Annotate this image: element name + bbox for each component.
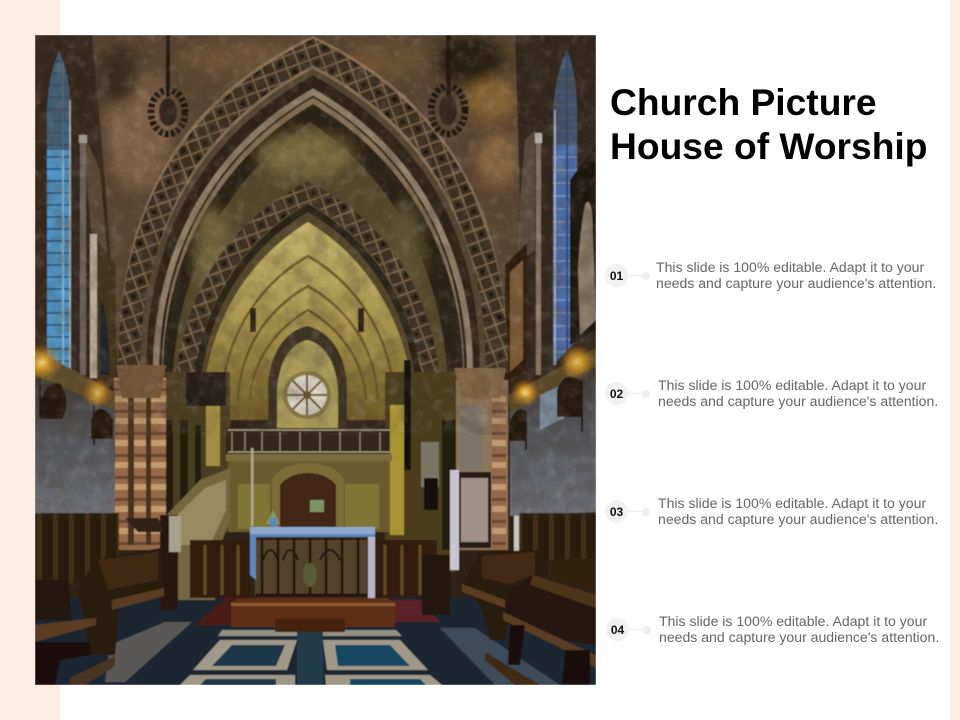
- right pews: [462, 550, 596, 685]
- right striped pillar: [454, 368, 508, 550]
- left wall lower: [35, 350, 115, 516]
- floor: [35, 598, 596, 685]
- left wood panelling: [35, 513, 119, 583]
- item 01: [605, 259, 936, 291]
- text 01: This slide is 100% editable. Adapt it to your: [656, 259, 924, 275]
- title: Church Picture: [610, 81, 877, 123]
- right wall and window: [505, 35, 596, 382]
- text 02: This slide is 100% editable. Adapt it to your: [658, 377, 926, 393]
- title: House of Worship: [610, 125, 927, 167]
- chandeliers: [151, 35, 465, 134]
- text 04: This slide is 100% editable. Adapt it to your: [659, 613, 927, 629]
- item 02: [605, 377, 938, 409]
- badge 01: [605, 264, 628, 287]
- text 02: needs and capture your audience's attention.: [658, 393, 938, 409]
- church interior picture: [35, 35, 596, 685]
- title: [610, 81, 927, 167]
- end wall niche and rose window: [268, 326, 347, 432]
- badge 01: 01: [610, 269, 623, 283]
- text 04: [659, 613, 939, 645]
- left striped pillar: [114, 365, 166, 550]
- text 03: needs and capture your audience's attention.: [658, 511, 938, 527]
- right wall lower: [508, 348, 596, 516]
- badge 02: [605, 382, 628, 405]
- text 01: needs and capture your audience's attention.: [656, 275, 936, 291]
- text 02: [658, 377, 938, 409]
- badge 04: [606, 618, 629, 641]
- item 04: [606, 613, 939, 645]
- badge 02: 02: [610, 387, 623, 401]
- left pews: [35, 548, 164, 685]
- badge 03: 03: [610, 505, 623, 519]
- base: [38, 371, 596, 599]
- badge 03: [605, 500, 628, 523]
- mottled texture: [35, 35, 596, 515]
- left wall and window: [35, 35, 118, 385]
- text 03: This slide is 100% editable. Adapt it to your: [658, 495, 926, 511]
- right side columns: [385, 360, 457, 572]
- inner arch band: [184, 192, 432, 410]
- left side columns: [160, 372, 230, 540]
- ceiling webs: [85, 35, 530, 372]
- middle vault: [172, 122, 448, 400]
- right wood panelling: [519, 513, 596, 573]
- text 04: needs and capture your audience's attention.: [659, 629, 939, 645]
- item 03: [605, 495, 938, 527]
- text 01: [656, 259, 936, 291]
- great arch: [118, 36, 508, 372]
- wall lamps glow: [22, 342, 595, 408]
- yellow vault: [202, 222, 414, 420]
- end wall: [226, 428, 392, 532]
- pulpit: [125, 468, 230, 610]
- text 03: [658, 495, 938, 527]
- badge 04: 04: [611, 623, 624, 637]
- right white panel: [450, 470, 519, 570]
- altar: [250, 448, 375, 598]
- choir chairs: [190, 540, 450, 615]
- altar platform: [231, 598, 395, 632]
